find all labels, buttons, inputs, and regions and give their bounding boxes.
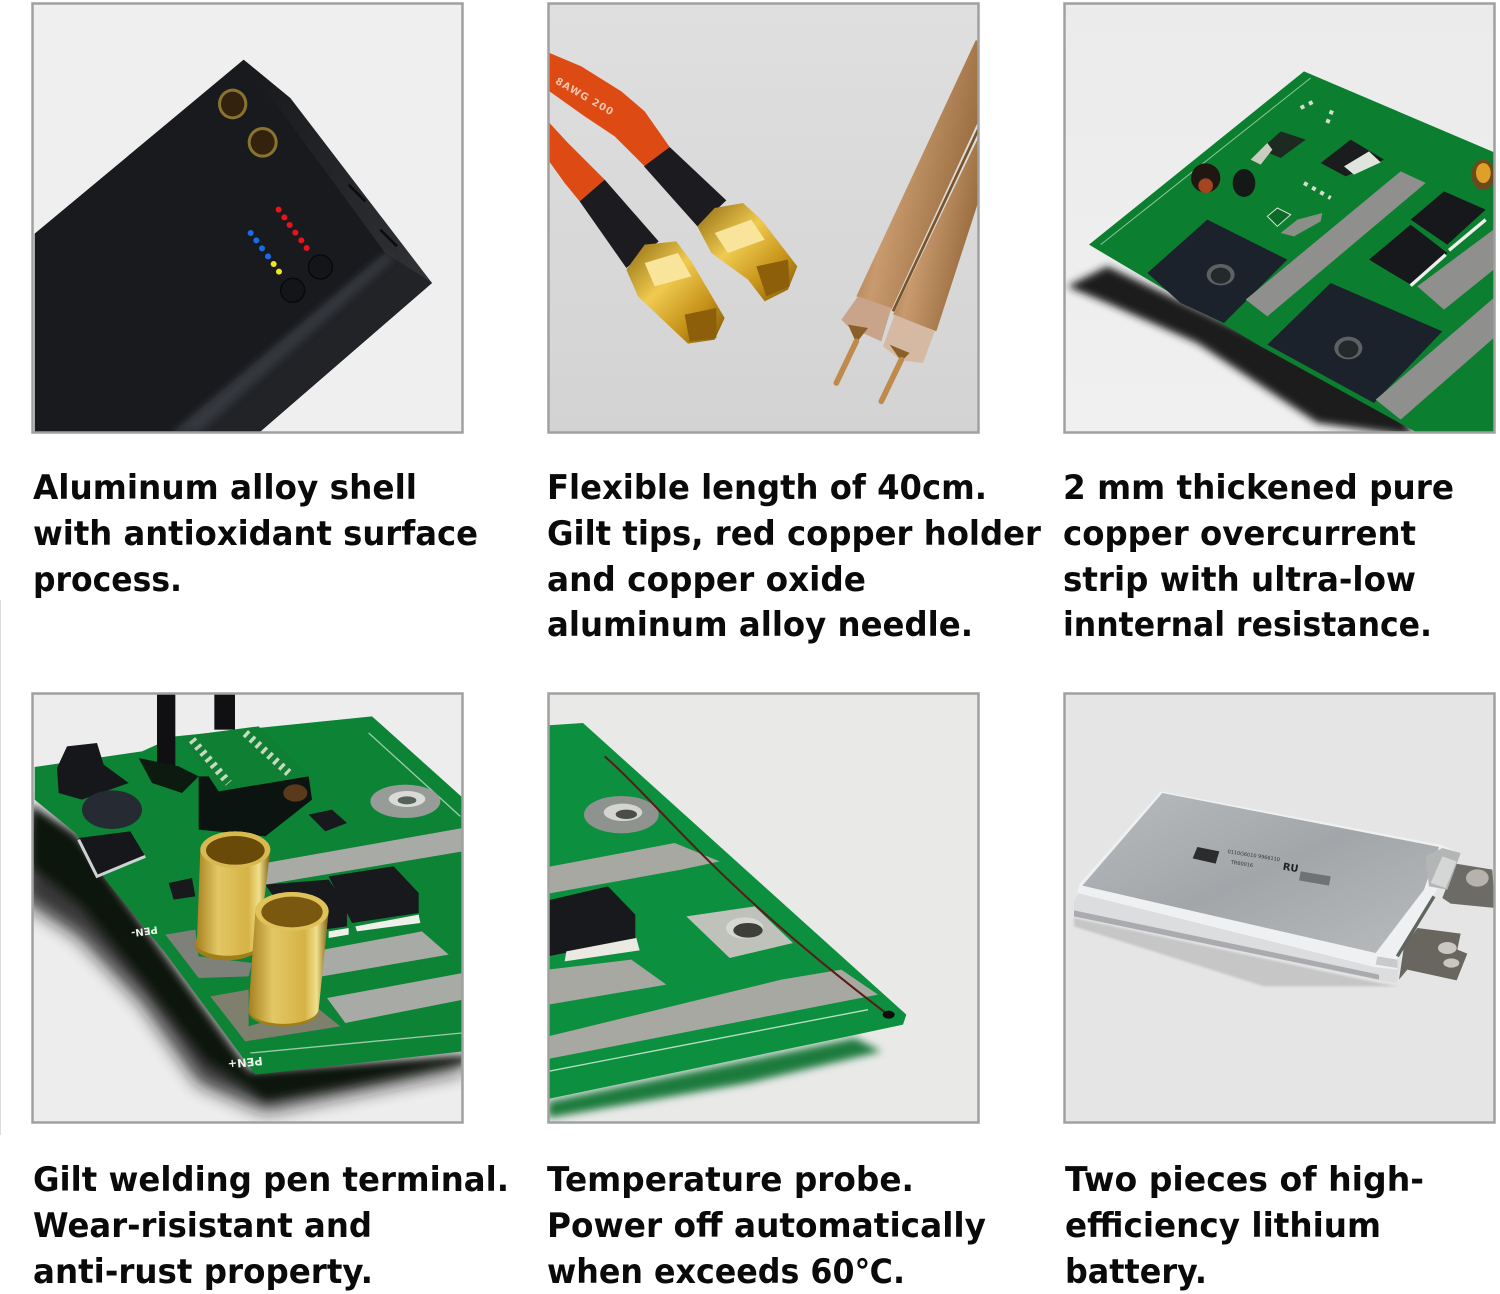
power chips and components	[1191, 101, 1495, 286]
text block: battery caption: battery.	[1065, 1252, 1207, 1291]
green board: PEN+	[227, 1054, 263, 1071]
text block: terminal caption: Wear-risistant and	[33, 1206, 372, 1245]
small daughter board	[182, 726, 312, 836]
panel: welding pen cables photo	[548, 3, 979, 434]
text block: shell caption: process.	[33, 560, 182, 599]
shadow	[548, 1038, 881, 1118]
text block: terminal caption	[33, 1160, 509, 1291]
battery print marks	[1193, 847, 1331, 886]
text block: probe caption: Power off automatically	[547, 1206, 986, 1245]
silver strips	[165, 828, 463, 1041]
text block: pen caption: and copper oxide	[547, 560, 866, 599]
panel: temperature probe photo	[548, 693, 979, 1124]
text block: pen caption: aluminum alloy needle.	[547, 605, 973, 644]
black heat-shrink sleeves	[580, 147, 726, 268]
connector and inductor	[57, 743, 199, 829]
text block: terminal caption: Gilt welding pen terminal.	[33, 1160, 509, 1199]
text block: shell caption	[33, 468, 478, 599]
text block: probe caption: Temperature probe.	[547, 1160, 914, 1199]
gold connectors	[626, 203, 797, 344]
green board	[35, 716, 463, 1075]
temperature probe wire	[605, 756, 895, 1019]
text block: pen caption	[547, 468, 1041, 644]
battery print marks: TR60016	[1229, 860, 1253, 869]
panel: aluminum shell photo	[32, 3, 463, 434]
battery tabs	[1399, 864, 1495, 980]
red cables	[548, 52, 670, 201]
USB-C port	[79, 831, 145, 878]
shadow	[1074, 918, 1399, 986]
black pads	[1147, 220, 1442, 403]
green board	[548, 723, 906, 1099]
power chips	[169, 810, 420, 938]
text block: copper strip caption: 2 mm thickened pure	[1063, 468, 1454, 507]
text block: pen caption: Flexible length of 40cm.	[547, 468, 987, 507]
text block: copper strip caption	[1063, 468, 1454, 644]
icon: gold sockets	[218, 89, 278, 158]
text block: battery caption: efficiency lithium	[1065, 1206, 1381, 1245]
icon: buttons	[281, 255, 332, 302]
power chip	[548, 886, 640, 961]
red cables: 8AWG 200	[553, 76, 616, 118]
text block: probe caption	[547, 1160, 986, 1291]
text block: copper strip caption: innternal resistance.	[1063, 605, 1432, 644]
green board: PEN-	[130, 923, 158, 938]
panel: gilt pen terminal photo	[22, 693, 465, 1124]
battery print marks: 0110G6010 9966110	[1227, 849, 1280, 863]
green board	[1089, 71, 1496, 435]
mounting hole pad	[370, 785, 440, 818]
text block: pen caption: Gilt tips, red copper holder	[547, 514, 1041, 553]
black wires	[157, 693, 235, 771]
device body	[35, 60, 432, 433]
battery cells	[1074, 791, 1461, 983]
copper welding needles	[836, 40, 979, 401]
text block: battery caption: Two pieces of high-	[1065, 1160, 1424, 1199]
battery pad	[686, 906, 793, 958]
text block: battery caption	[1065, 1160, 1424, 1291]
text block: shell caption: with antioxidant surface	[33, 514, 478, 553]
silver strips	[1246, 171, 1496, 420]
text block: copper strip caption: strip with ultra-low	[1063, 560, 1416, 599]
faint stray edge line	[0, 600, 1, 1135]
panel: lithium battery photo	[1064, 693, 1495, 1124]
mounting pad	[584, 796, 659, 833]
text block: copper strip caption: copper overcurrent	[1063, 514, 1416, 553]
icon: LED indicators	[248, 207, 310, 275]
silver strips	[548, 843, 878, 1059]
panel: copper strip circuit board photo	[1064, 3, 1496, 436]
shadow	[22, 806, 465, 1111]
text block: probe caption: when exceeds 60℃.	[547, 1252, 905, 1291]
gold terminals	[195, 831, 329, 1027]
text block: terminal caption: anti-rust property.	[33, 1252, 373, 1291]
shadow	[1067, 266, 1414, 436]
battery print marks: RU	[1282, 862, 1299, 875]
text block: shell caption: Aluminum alloy shell	[33, 468, 417, 507]
